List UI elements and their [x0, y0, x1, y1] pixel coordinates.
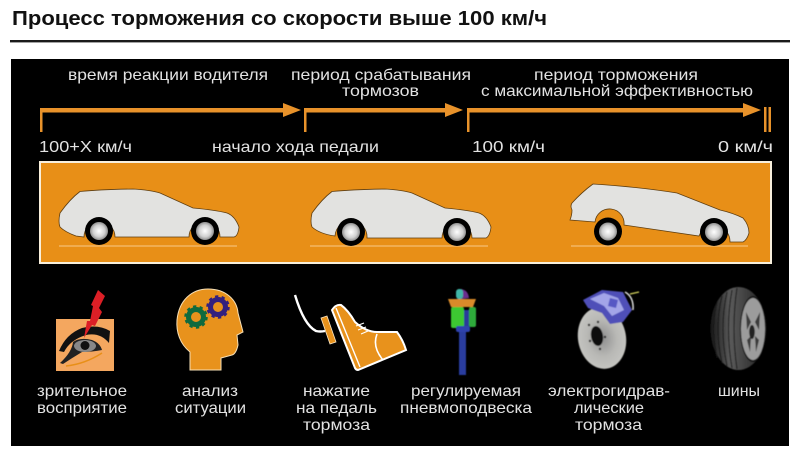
label: situation analysis: анализ — [182, 383, 238, 400]
speed label: 100+X: 100+X км/ч — [39, 139, 132, 156]
label: pressing brake pedal: нажатие — [303, 383, 370, 400]
label: adaptive air suspension — [400, 383, 532, 417]
heading: brake actuation period — [291, 67, 471, 100]
label: pressing brake pedal — [296, 383, 377, 434]
label: tyres: шины — [718, 383, 760, 400]
panel: orange car strip — [40, 162, 771, 263]
label: visual perception: зрительное — [37, 383, 127, 400]
label: visual perception — [37, 383, 127, 417]
label: visual perception: восприятие — [37, 400, 127, 417]
car 1 — [59, 189, 239, 246]
label: electrohydraulic brakes: тормоза — [575, 417, 642, 434]
icon: foot on pedal — [295, 295, 406, 370]
label: adaptive air suspension: пневмоподвеска — [400, 400, 532, 417]
stop marker — [764, 107, 771, 132]
label: electrohydraulic brakes — [548, 383, 670, 434]
label: electrohydraulic brakes: лические — [574, 400, 644, 417]
title: Процесс торможения со скорости выше 100 км/ч — [12, 7, 547, 30]
label: adaptive air suspension: регулируемая — [411, 383, 521, 400]
heading: full braking period: период торможения — [534, 67, 698, 84]
label: electrohydraulic brakes: электрогидрав- — [548, 383, 670, 400]
icon: tyre — [710, 287, 766, 370]
heading: driver reaction time: время реакции водителя — [68, 67, 268, 84]
label: pressing brake pedal: тормоза — [303, 417, 370, 434]
icon: air suspension — [448, 289, 476, 375]
heading: full braking period: с максимальной эффективностью — [481, 83, 753, 100]
car 2 — [310, 189, 491, 246]
arrow: reaction time — [40, 103, 301, 132]
arrow: braking period — [467, 103, 761, 132]
label: pedal travel start: начало хода педали — [212, 139, 379, 156]
car 3 — [570, 184, 749, 246]
heading: brake actuation period: тормозов — [342, 83, 419, 100]
icon: head with gears — [177, 289, 243, 370]
icon: brake disc and caliper — [573, 290, 639, 373]
heading: brake actuation period: период срабатывания — [291, 67, 471, 84]
label: situation analysis: ситуации — [175, 400, 246, 417]
label: situation analysis — [175, 383, 246, 417]
speed label: 100: 100 км/ч — [472, 139, 545, 156]
heading: full braking period — [481, 67, 753, 100]
speed label: 0: 0 км/ч — [718, 139, 773, 156]
icon: eye with lightning — [56, 290, 114, 371]
arrow: actuation period — [304, 103, 463, 132]
label: pressing brake pedal: на педаль — [296, 400, 377, 417]
